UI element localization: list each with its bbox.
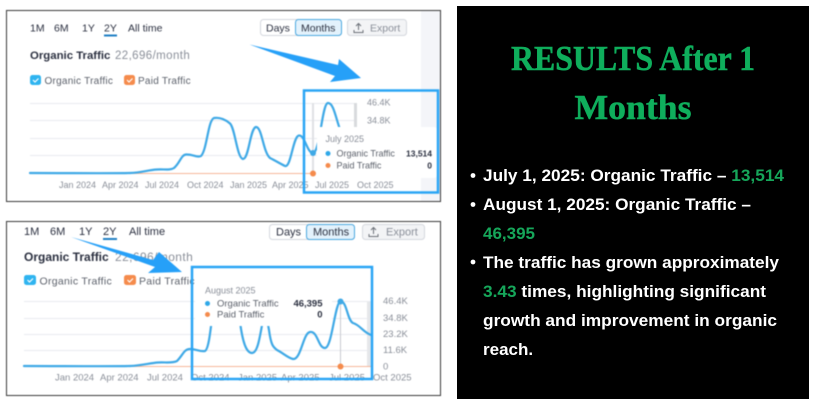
arrow pointing to highlight box [250,44,361,82]
x axis labels: Jul 2025 [315,180,349,190]
x axis labels: Jul 2024 [145,180,179,190]
bullet: growth summary: 3.43 times, highlighting significant [483,282,766,301]
tooltip: July 2025: 13,514 [406,148,432,158]
bullet: August traffic: 46,395 [483,224,535,243]
chart legend: Organic Traffic [44,76,113,87]
tooltip: August 2025: 46,395 [293,298,323,310]
bullet: August traffic [471,195,751,243]
x axis labels [59,180,394,190]
line chart: organic and paid traffic [24,284,372,370]
highlight box [304,90,438,192]
x axis labels: Apr 2024 [102,180,139,190]
export button [362,224,424,240]
time range tabs: 1Y [82,22,95,34]
highlight box [192,267,372,379]
panel: results summary [457,6,809,399]
tooltip: July 2025: Paid Traffic [336,160,382,170]
x axis labels: Jul 2025 [329,372,365,384]
panel: July 2025 traffic screenshot [6,10,440,202]
arrow pointing to highlight box [71,237,182,273]
tooltip: August 2025: Paid Traffic [217,310,265,320]
y axis labels: 34.8K [367,116,391,126]
chart legend: Paid Traffic [138,76,191,87]
time range tabs: 2Y [103,226,117,238]
tooltip: August 2025: Organic Traffic [217,298,279,310]
bullet: growth summary [471,253,780,359]
chart legend [30,75,191,87]
x axis labels: Jan 2025 [238,372,277,384]
chart heading [24,250,193,264]
title: RESULTS After 1 [511,39,755,78]
time range tabs [24,226,165,240]
chart legend: Paid Traffic [139,276,195,288]
line chart: organic and paid traffic [30,103,357,176]
x axis labels: Oct 2025 [373,372,412,384]
y axis labels: 46.4K [383,296,408,307]
chart heading: Organic Traffic [24,250,109,264]
bullet: growth summary: The traffic has grown approximately [483,253,780,272]
chart heading: Organic Traffic [30,50,110,62]
tooltip: July 2025: 0 [427,160,432,170]
x axis labels: Apr 2025 [272,180,309,190]
y axis labels: 0 [383,362,388,372]
time range tabs: 1Y [79,226,93,238]
time range tabs: All time [128,22,163,34]
x axis labels: Jan 2024 [59,180,96,190]
time range tabs: 2Y [104,22,117,34]
x axis labels: Jan 2024 [55,372,94,384]
x axis labels: Apr 2024 [100,372,139,384]
x axis labels: Oct 2024 [187,180,224,190]
time range tabs: 6M [54,22,69,34]
time range tabs: All time [129,226,165,238]
export button [348,20,406,36]
bullet: growth summary: growth and improvement in organic [483,311,777,330]
title: Months [574,88,692,127]
bullet: July traffic: July 1, 2025: Organic Traffic – 13,514 [483,166,785,185]
days and months toggle: Months [313,226,350,238]
tooltip: August 2025: 0 [317,310,322,320]
panel: August 2025 traffic screenshot [6,222,440,396]
days and months toggle: Days [266,22,290,34]
chart legend: Organic Traffic [40,276,112,288]
y axis labels [383,296,408,372]
time range tabs [30,22,163,36]
time range tabs: 1M [24,226,39,238]
tooltip: August 2025: August 2025 [205,286,256,296]
y axis labels: 34.8K [383,313,408,324]
x axis labels: Oct 2025 [357,180,394,190]
x axis labels: Jul 2024 [147,372,183,384]
time range tabs: 6M [50,226,65,238]
x axis labels: Jan 2025 [230,180,267,190]
chart legend [24,275,195,288]
days and months toggle [270,224,354,240]
title [511,39,755,127]
tooltip: July 2025: July 2025 [326,134,364,144]
x axis labels: Oct 2024 [191,372,230,384]
export button: Export [386,226,418,238]
chart heading: 22,696/month [115,250,193,264]
x axis labels: Apr 2025 [281,372,320,384]
y axis labels [367,98,391,126]
days and months toggle [260,20,342,36]
days and months toggle: Months [301,22,335,34]
tooltip: July 2025 [317,127,437,178]
y axis labels: 23.2K [383,329,408,340]
chart heading: 22,696/month [115,50,190,62]
tooltip: July 2025: Organic Traffic [336,148,395,158]
bullet: August traffic: August 1, 2025: Organic Traffic – [483,195,751,214]
export button: Export [370,22,400,34]
days and months toggle: Days [276,226,302,238]
y axis labels: 11.6K [383,345,408,356]
x axis labels [55,372,412,384]
chart heading [30,50,190,62]
y axis labels: 46.4K [367,98,391,108]
tooltip: August 2025 [195,280,332,326]
bullet: growth summary: reach. [483,340,533,359]
time range tabs: 1M [30,22,45,34]
